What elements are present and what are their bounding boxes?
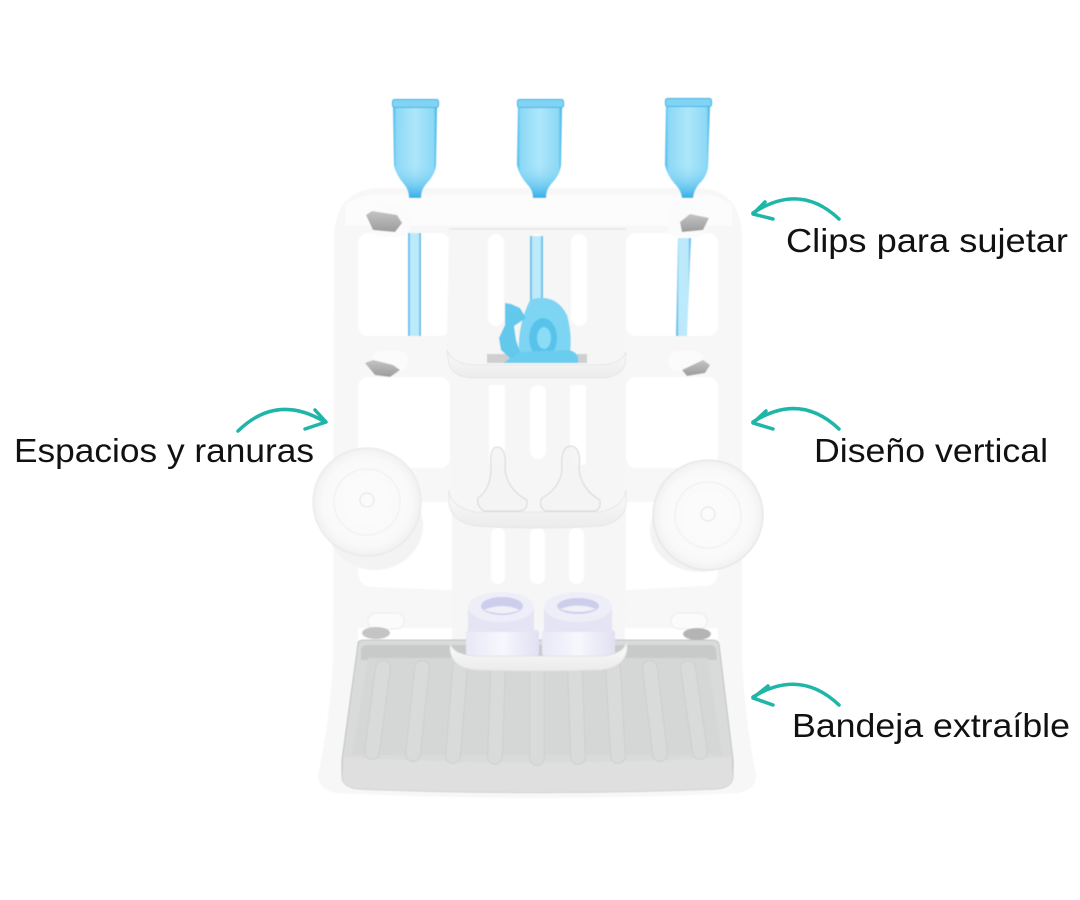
- clip low left: [362, 613, 404, 639]
- callout: clips para sujetar: [753, 199, 1068, 259]
- callout: bandeja extraíble: [753, 684, 1070, 744]
- lower shelf with bottle collars: [450, 592, 627, 671]
- pacifier: [499, 298, 578, 363]
- bottle center: [517, 100, 564, 198]
- blue bottles: [392, 98, 712, 198]
- clip low right: [671, 613, 711, 640]
- label: bandeja: Bandeja extraíble: [792, 707, 1070, 744]
- left breast pump flange: [313, 448, 423, 570]
- grey clips: [362, 206, 711, 640]
- bottle left: [392, 100, 438, 198]
- clip mid right: [668, 351, 710, 376]
- center column with slots: [447, 229, 626, 660]
- right breast pump flange: [650, 460, 763, 572]
- tray ribs: [372, 668, 700, 758]
- product: vertical drying rack: [313, 98, 763, 798]
- removable grey tray: [342, 640, 733, 792]
- slots: [488, 234, 587, 584]
- clip mid left: [365, 351, 408, 377]
- middle shelf with nipples: [449, 446, 626, 528]
- label: espacios: Espacios y ranuras: [14, 432, 314, 469]
- clip top right: [668, 206, 709, 237]
- frame openings: [358, 233, 718, 642]
- callout: diseño vertical: [753, 409, 1048, 469]
- blue bottle stems: [408, 233, 691, 336]
- bottle right: [665, 98, 712, 198]
- label: diseño: Diseño vertical: [814, 432, 1048, 469]
- collar right: [542, 592, 615, 656]
- callout: espacios y ranuras: [14, 409, 326, 469]
- arrow: clips: [753, 199, 839, 219]
- clip top left: [366, 206, 410, 237]
- rack frame: [318, 188, 756, 798]
- arrow: diseño: [753, 409, 839, 429]
- collar left: [466, 592, 539, 656]
- upper shelf with pacifier: [447, 298, 626, 378]
- arrow: bandeja: [753, 684, 839, 705]
- label: clips: Clips para sujetar: [786, 222, 1068, 259]
- center stem: [530, 236, 543, 300]
- arrow: espacios: [238, 409, 326, 431]
- nipples: [478, 446, 600, 511]
